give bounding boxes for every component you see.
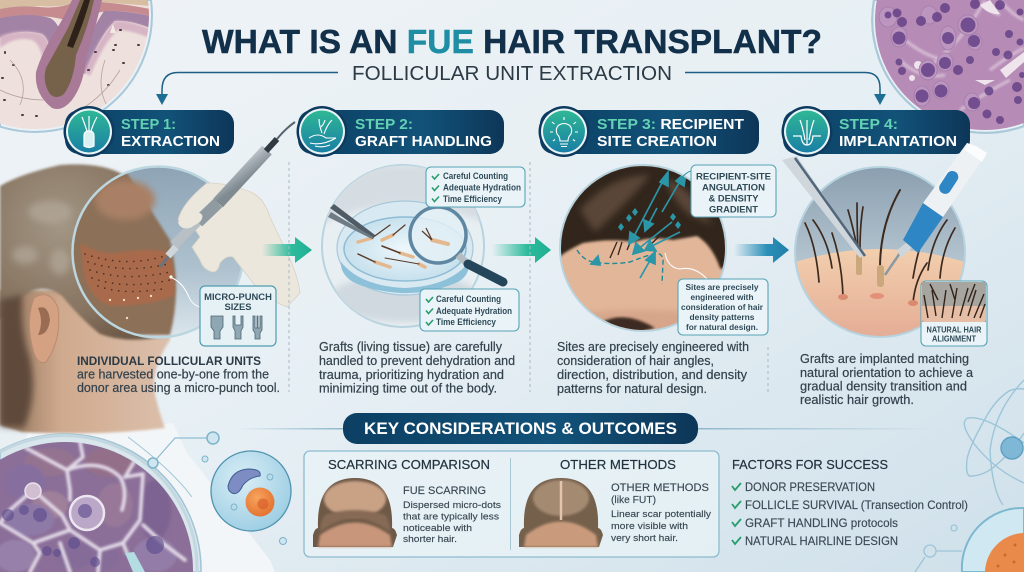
text: step 2 description: Grafts (living tissue) are carefully <box>319 340 503 354</box>
illustration: cell with nucleus <box>211 451 291 531</box>
text: step 1 description: donor area using a micro-punch tool. <box>77 381 280 395</box>
callout: graft checklist bottom: Adequate Hydration <box>436 305 512 316</box>
illustration: cell bottom right <box>962 508 1024 572</box>
icon: light bulb <box>550 117 578 146</box>
illustration: implantation scene <box>782 143 987 340</box>
callout: graft checklist top: Time Efficiency <box>443 193 503 204</box>
step 3 badge <box>538 106 759 157</box>
text: step 1 description: are harvested one-by-one from the <box>77 368 269 382</box>
hairline dashes <box>577 250 663 284</box>
callout: micro-punch sizes <box>169 275 276 346</box>
beard <box>0 295 33 428</box>
step 2 badge <box>296 106 504 157</box>
icon: check marks <box>732 483 741 544</box>
hair highlights <box>12 201 72 275</box>
callout: graft checklist bottom: Careful Counting <box>436 293 501 304</box>
panel: factors for success <box>732 457 968 548</box>
text: other methods: Linear scar potentially <box>611 509 711 520</box>
step 2 badge: GRAFT HANDLING <box>355 133 492 150</box>
panel: scarring comparison and other methods <box>304 451 719 557</box>
callout: recipient-site angulation: GRADIENT <box>709 204 758 214</box>
icon: implanted follicle <box>793 120 821 145</box>
cell membranes <box>0 442 185 572</box>
callout: micro-punch sizes: MICRO-PUNCH <box>204 291 272 302</box>
text: step 4 description: natural orientation to achieve a <box>800 366 973 380</box>
step 2 badge: STEP 2: <box>355 117 413 133</box>
callout: graft checklist bottom <box>420 289 519 331</box>
step 3 badge: STEP 3: RECIPIENT <box>597 117 744 133</box>
step 1 badge <box>64 106 234 157</box>
text: other methods: very short hair. <box>611 533 678 544</box>
text: FUE scarring <box>403 485 501 545</box>
fingers <box>178 212 202 228</box>
short implanted hairs <box>610 236 660 258</box>
grafts <box>358 225 425 267</box>
callout: recipient-site angulation: ANGULATION <box>702 182 765 192</box>
step 1 badge: EXTRACTION <box>121 133 220 150</box>
text: step 3 description <box>557 340 749 396</box>
text: other methods: (like FUT) <box>611 495 656 506</box>
step 4 badge: STEP 4: <box>839 117 898 133</box>
callout: sites engineered: Sites are precisely <box>686 282 759 292</box>
panel: factors for success: FACTORS FOR SUCCESS <box>732 457 888 472</box>
icon: punch sizes <box>211 316 262 339</box>
illustration: micro-punch tool <box>160 122 295 267</box>
step 1 badge: STEP 1: <box>121 117 176 133</box>
title: WHAT IS AN FUE HAIR TRANSPLANT? <box>202 23 822 60</box>
text: step 4 description: gradual density transition and <box>800 380 967 394</box>
icon: hand holding graft <box>309 119 336 147</box>
list: success factors <box>745 480 968 548</box>
text: FUE scarring: shorter hair. <box>403 534 457 545</box>
callout: recipient-site angulation <box>691 165 776 217</box>
hair <box>0 164 176 340</box>
callout: sites engineered <box>678 279 768 335</box>
direction arrows <box>591 172 686 278</box>
illustration: cell tissue bottom left <box>0 434 201 572</box>
text: step 4 description: Grafts are implanted matching <box>800 352 969 366</box>
forceps <box>328 204 375 239</box>
ear <box>29 295 59 363</box>
callout: recipient-site angulation: RECIPIENT-SITE <box>696 170 771 182</box>
text: step 4 description: realistic hair growth. <box>800 393 914 407</box>
text: FUE scarring: that are typically less <box>403 512 499 522</box>
arrow: step 1 to step 2 <box>262 237 312 263</box>
forceps <box>782 156 865 258</box>
magnifying glass <box>410 207 503 282</box>
text: step 3 description: Sites are precisely engineered with <box>557 340 749 354</box>
text: step 4 description <box>800 352 973 407</box>
text: step 3 description: patterns for natural design. <box>557 382 707 396</box>
text: FUE scarring: FUE SCARRING <box>403 485 486 497</box>
text: step 3 description: consideration of hair angles, <box>557 354 714 368</box>
list: success factors: DONOR PRESERVATION <box>745 480 875 494</box>
arrow: subtitle to step 1 <box>156 72 338 105</box>
list: success factors: NATURAL HAIRLINE DESIGN <box>745 534 898 548</box>
illustration: man's head, neck and shirt <box>0 164 275 572</box>
illustration: FUE scalp <box>313 478 397 547</box>
connector lines and nodes <box>148 432 286 544</box>
text: step 2 description: minimizing time out of the body. <box>319 382 497 396</box>
hairs <box>805 190 955 303</box>
arrow: subtitle to step 4 <box>685 72 886 105</box>
heading: key considerations and outcomes <box>237 413 935 444</box>
callout: sites engineered: engineered with <box>690 292 754 302</box>
heading: scarring comparison: SCARRING COMPARISON <box>328 457 490 472</box>
callout: natural hair alignment: ALIGNMENT <box>932 334 976 344</box>
callout: graft checklist top <box>426 167 525 207</box>
heading: key considerations and outcomes: KEY CONSIDERATIONS & OUTCOMES <box>364 419 677 438</box>
callout: sites engineered: density patterns <box>690 312 755 322</box>
text: FUE scarring: noticeable with <box>403 523 472 534</box>
illustration: atom <box>964 380 1024 505</box>
text: step 1 description: INDIVIDUAL FOLLICULAR UNITS <box>77 354 261 368</box>
callout: recipient-site angulation: & DENSITY <box>708 192 759 204</box>
arrow: step 3 to step 4 <box>734 237 789 263</box>
heading: other methods: OTHER METHODS <box>560 457 676 472</box>
step 3 badge: SITE CREATION <box>597 133 717 150</box>
list: success factors: GRAFT HANDLING protocols <box>745 516 898 530</box>
text: other methods <box>611 482 711 544</box>
connector nodes bottom right <box>915 525 962 572</box>
text: FUE scarring: Dispersed micro-dots <box>403 500 501 511</box>
text: step 3 description: direction, distribution, and density <box>557 368 748 382</box>
callout: graft checklist bottom: Time Efficiency <box>436 316 497 327</box>
text: step 2 description: handled to prevent dehydration and <box>319 354 515 368</box>
step 4 badge: IMPLANTATION <box>839 133 957 150</box>
illustration: tissue micrograph top right <box>872 0 1024 133</box>
implanter pen <box>885 143 987 275</box>
callout: natural hair alignment <box>921 281 987 346</box>
arrow: step 2 to step 3 <box>492 237 551 263</box>
callout: sites engineered: consideration of hair <box>681 302 764 312</box>
callout: graft checklist top: Adequate Hydration <box>443 182 521 192</box>
neck <box>0 290 170 433</box>
callout: sites engineered: for natural design. <box>686 322 758 332</box>
icon: follicle <box>82 116 97 148</box>
callout: natural hair alignment: NATURAL HAIR <box>926 326 982 334</box>
illustration: petri dish with grafts <box>320 165 503 327</box>
shirt <box>0 423 275 572</box>
callout: graft checklist top: Careful Counting <box>443 170 508 181</box>
callout: micro-punch sizes: SIZES <box>224 301 252 312</box>
text: step 1 description <box>77 354 280 395</box>
step 4 badge <box>782 106 970 157</box>
illustration: skin cross-section with hair follicle <box>0 0 152 132</box>
text: step 2 description <box>319 340 515 396</box>
subtitle: FOLLICULAR UNIT EXTRACTION <box>352 63 672 85</box>
illustration: strip scar scalp <box>519 478 603 547</box>
text: step 2 description: trauma, prioritizing hydration and <box>319 368 504 382</box>
illustration: hairline with angulation arrows <box>555 165 730 334</box>
list: success factors: FOLLICLE SURVIVAL (Transection Control) <box>745 498 968 512</box>
illustration: gloved hand <box>178 183 300 307</box>
text: other methods: OTHER METHODS <box>611 482 709 494</box>
text: other methods: more visible with <box>611 521 688 532</box>
illustration: donor area magnified circle <box>70 165 244 338</box>
